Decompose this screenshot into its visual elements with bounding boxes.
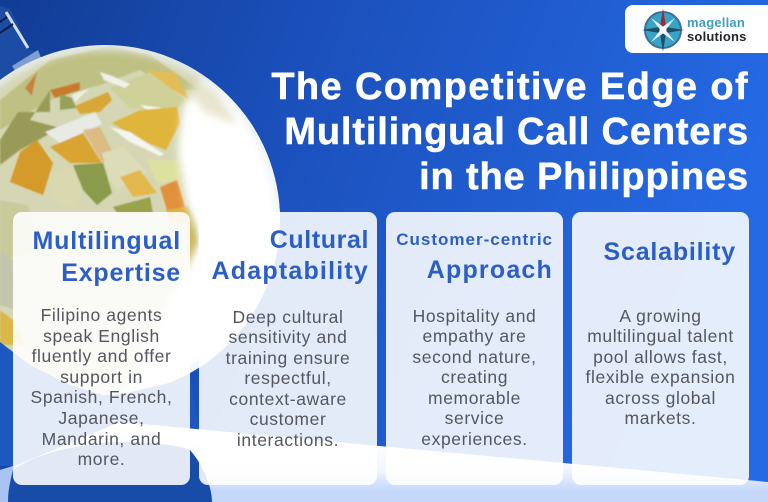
text: cultural adaptability: interactions. <box>237 430 339 450</box>
text: cultural adaptability: Deep cultural <box>233 306 343 326</box>
panel: customer-centric approach <box>386 212 563 485</box>
heading: customer-centric approach: Customer-centric <box>396 230 553 249</box>
text: multilingual expertise: fluently and offer <box>32 346 171 366</box>
heading: cultural adaptability: Cultural <box>270 226 369 254</box>
text: customer-centric approach: Hospitality and <box>413 306 536 326</box>
logo panel <box>625 5 768 53</box>
text: cultural adaptability: context-aware <box>229 389 347 409</box>
text: multilingual expertise: speak English <box>43 326 160 346</box>
text: cultural adaptability: customer <box>250 409 326 429</box>
text: customer-centric approach: creating <box>441 367 508 387</box>
title <box>271 66 749 198</box>
text: cultural adaptability: sensitivity and <box>229 327 347 347</box>
globe lower shadow <box>0 342 200 466</box>
text: cultural adaptability: training ensure <box>226 348 350 368</box>
text: customer-centric approach: second nature, <box>412 347 537 367</box>
logo text: magellan <box>687 15 745 30</box>
text: customer-centric approach: memorable <box>428 388 521 408</box>
globe highlight <box>136 77 280 382</box>
floor <box>0 422 768 502</box>
text: cultural adaptability <box>226 306 350 450</box>
text: scalability: across global <box>605 388 716 408</box>
text: scalability: flexible expansion <box>586 367 735 387</box>
heading: cultural adaptability <box>212 226 369 284</box>
text: multilingual expertise: Filipino agents <box>41 305 162 325</box>
globe mount <box>0 6 50 84</box>
text: scalability <box>586 306 735 428</box>
heading: cultural adaptability: Adaptability <box>212 256 369 284</box>
heading: multilingual expertise: Expertise <box>61 258 181 286</box>
text: customer-centric approach <box>412 306 537 449</box>
text: scalability: pool allows fast, <box>593 347 728 367</box>
text: multilingual expertise: support in <box>60 367 143 387</box>
text: customer-centric approach: empathy are <box>423 326 526 346</box>
panel: multilingual expertise <box>13 212 190 485</box>
text: scalability: multilingual talent <box>587 326 734 346</box>
globe <box>0 45 280 395</box>
title: Multilingual Call Centers <box>284 111 749 153</box>
text: multilingual expertise <box>31 305 172 469</box>
heading: multilingual expertise: Multilingual <box>33 227 181 255</box>
text: customer-centric approach: experiences. <box>421 429 528 449</box>
panel: cultural adaptability <box>199 212 377 485</box>
heading: customer-centric approach <box>396 230 553 284</box>
heading: scalability: Scalability <box>604 238 736 266</box>
heading: customer-centric approach: Approach <box>427 256 553 284</box>
heading: multilingual expertise <box>33 227 181 286</box>
text: multilingual expertise: more. <box>78 449 125 469</box>
text: multilingual expertise: Spanish, French, <box>31 387 172 407</box>
text: scalability: A growing <box>619 306 702 326</box>
title: in the Philippines <box>419 156 749 198</box>
text: multilingual expertise: Mandarin, and <box>42 429 161 449</box>
panel: scalability <box>572 212 749 485</box>
logo text: solutions <box>687 28 747 44</box>
text: multilingual expertise: Japanese, <box>58 408 145 428</box>
icon: compass <box>642 9 684 51</box>
title: The Competitive Edge of <box>271 66 749 108</box>
logo text <box>687 15 747 44</box>
text: customer-centric approach: service <box>445 408 504 428</box>
text: scalability: markets. <box>625 408 696 428</box>
globe base <box>8 442 212 502</box>
text: cultural adaptability: respectful, <box>244 368 332 388</box>
